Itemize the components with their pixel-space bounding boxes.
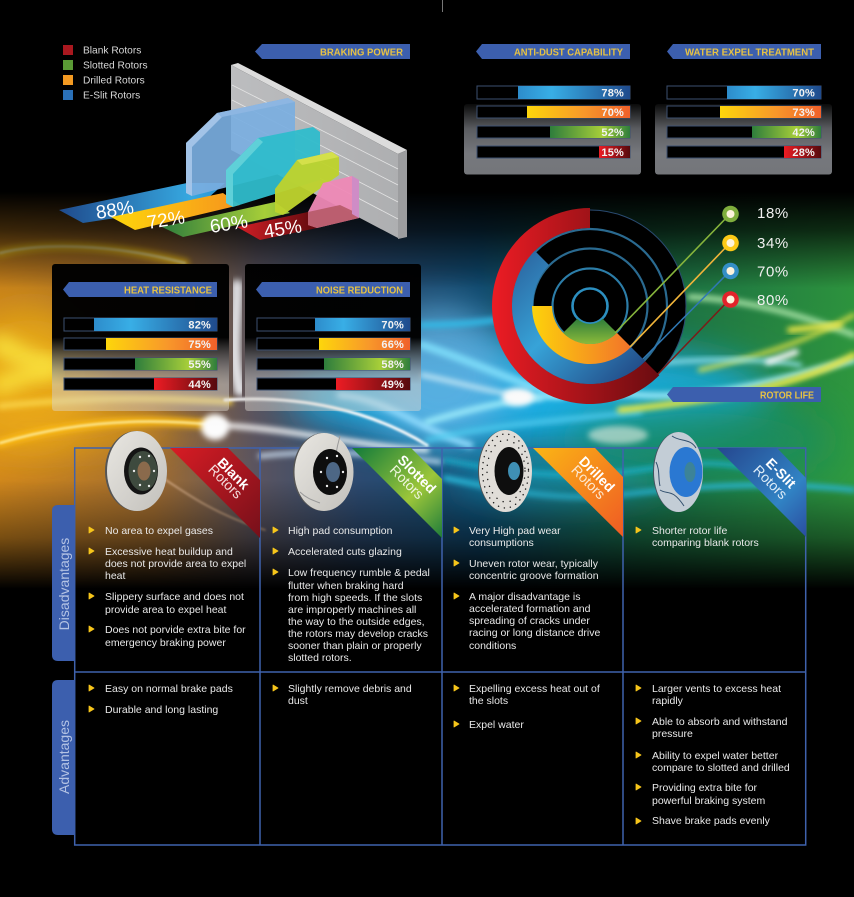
text block: slotted disadvantages: flutter when braking hard [288,580,404,592]
text block: drilled disadvantages: accelerated formation and [469,603,591,615]
marker: 34% [722,235,789,252]
text block: slotted disadvantages: High pad consumption [288,525,393,537]
side tab: disadvantages: Disadvantages [56,538,72,630]
panel: heat resistance [52,264,229,411]
text block: e-slit disadvantages [636,525,759,549]
text block: blank advantages: Durable and long lasting [105,704,218,716]
text block: slotted advantages: dust [288,695,308,707]
marker: 18%: 18% [757,205,789,222]
panel: anti-dust capability [464,44,641,174]
marker: 34%: 34% [757,235,789,252]
panel: anti-dust capability: ANTI-DUST CAPABILITY [514,48,623,58]
panel: water expel treatment: 42% [792,127,815,139]
panel: heat resistance: HEAT RESISTANCE [124,286,212,296]
panel: anti-dust capability: 78% [601,88,624,100]
panel: noise reduction: 49% [381,379,404,391]
panel: noise reduction [245,264,421,411]
panel: water expel treatment [655,44,832,174]
side tab: advantages: Advantages [56,720,72,794]
text block: blank disadvantages: does not provide area to expel [105,558,246,570]
text block: drilled advantages: Expel water [469,719,524,731]
text block: slotted disadvantages: from high speeds. If the slots [288,592,422,604]
panel: anti-dust capability: 52% [601,127,624,139]
ribbon: drilled rotors: Drilled [576,453,618,495]
text block: e-slit advantages: Shave brake pads evenly [652,815,771,827]
text block: e-slit advantages: compare to slotted and drilled [652,762,790,774]
text block: e-slit advantages: powerful braking system [652,795,765,807]
text block: e-slit disadvantages: comparing blank rotors [652,537,759,549]
text block: drilled advantages [454,683,600,731]
text block: blank disadvantages: provide area to expel heat [105,604,226,616]
panel: noise reduction: 70% [381,320,404,332]
side tab: advantages [52,680,75,835]
text block: slotted disadvantages [273,525,430,664]
ribbon: e-slit rotors: Rotors [750,462,791,502]
rotor life heading: ROTOR LIFE [760,390,814,402]
ribbon: drilled rotors [533,448,623,537]
legend [63,45,148,102]
text block: e-slit advantages: Larger vents to excess heat [652,683,781,695]
ribbon: blank rotors: Blank [214,454,253,493]
rotor image: e-slit [653,432,703,512]
value: 60%: 60% [208,211,249,238]
text block: drilled disadvantages: Uneven rotor wear, typically [469,558,599,570]
panel: water expel treatment: 28% [792,147,815,159]
text block: blank disadvantages: No area to expel gases [105,525,213,537]
text block: blank disadvantages: Slippery surface and does not [105,591,244,603]
value: 45%: 45% [262,216,303,243]
panel: heat resistance: 75% [188,339,211,351]
panel: noise reduction: 66% [381,339,404,351]
text block: slotted disadvantages: Accelerated cuts glazing [288,546,402,558]
panel: noise reduction: 58% [381,359,404,371]
ribbon: drilled rotors: Rotors [568,462,609,502]
text block: drilled disadvantages: concentric groove formation [469,570,599,582]
panel: water expel treatment: WATER EXPEL TREATMENT [685,48,814,58]
panel: anti-dust capability: 70% [601,107,624,119]
text block: drilled disadvantages: racing or long distance drive [469,627,600,639]
text block: e-slit disadvantages: Shorter rotor life [652,525,727,537]
text block: blank disadvantages: Excessive heat buildup and [105,546,233,558]
panel: anti-dust capability: 15% [601,147,624,159]
marker: 18% [722,205,789,222]
text block: e-slit advantages: Able to absorb and withstand [652,716,788,728]
text block: blank advantages: Easy on normal brake pads [105,683,233,695]
text block: drilled disadvantages [454,525,600,652]
text block: slotted disadvantages: the rotors may develop cracks [288,628,428,640]
panel: heat resistance: 82% [188,320,211,332]
braking power heading: BRAKING POWER [320,48,404,58]
text block: slotted disadvantages: slotted rotors. [288,652,352,664]
text block: slotted disadvantages: the way to the outside edges, [288,616,425,628]
braking power heading [255,44,410,59]
value: 88%: 88% [94,197,135,224]
panel: water expel treatment: 70% [792,88,815,100]
ribbon: slotted rotors [352,448,442,538]
side tab: disadvantages [52,505,75,661]
text block: e-slit advantages: Providing extra bite for [652,782,758,794]
marker: 80% [722,291,789,309]
text block: blank disadvantages: emergency braking power [105,637,226,649]
text block: drilled advantages: Expelling excess heat out of [469,683,600,695]
rotor life radial chart [492,205,789,404]
legend: Blank Rotors [83,46,141,56]
text block: slotted advantages [273,683,412,707]
text block: drilled disadvantages: Very High pad wear [469,525,561,537]
marker: 70%: 70% [757,264,789,280]
marker: 70% [722,263,789,280]
legend: Slotted Rotors [83,60,148,72]
ribbon: slotted rotors: Slotted [395,452,439,496]
ribbon: slotted rotors: Rotors [387,462,427,502]
text block: slotted disadvantages: are improperly machines all [288,604,416,616]
rotor image: drilled [478,430,532,512]
comparison table grid [74,448,806,845]
text block: blank advantages [89,683,233,716]
text block: drilled disadvantages: A major disadvantage is [469,591,580,603]
ribbon: blank rotors [170,448,260,538]
text block: e-slit advantages: Ability to expel water better [652,750,779,762]
text block: blank disadvantages [89,525,246,649]
text block: drilled advantages: the slots [469,695,508,707]
text block: slotted advantages: Slightly remove debris and [288,683,412,695]
rotor life heading [667,387,821,402]
text block: slotted disadvantages: sooner than plain or properly [288,640,422,652]
legend: E-Slit Rotors [83,90,140,102]
rotor image: blank [105,431,167,511]
text block: drilled disadvantages: consumptions [469,537,534,549]
legend: Drilled Rotors [83,76,145,86]
text block: e-slit advantages: rapidly [652,695,684,707]
text block: e-slit advantages: pressure [652,728,693,740]
marker: 80%: 80% [757,292,789,309]
3D braking power chart [59,63,407,243]
panel: heat resistance: 44% [188,379,211,391]
panel: water expel treatment: 73% [792,107,815,119]
panel: heat resistance: 55% [188,359,211,371]
text block: blank disadvantages: Does not porvide extra bite for [105,624,246,636]
text block: blank disadvantages: heat [105,570,126,582]
rotor image: slotted [293,433,354,511]
ribbon: e-slit rotors [717,448,806,537]
text block: drilled disadvantages: spreading of cracks under [469,615,590,627]
ribbon: blank rotors: Rotors [205,461,246,502]
text block: e-slit advantages [636,683,790,827]
panel: noise reduction: NOISE REDUCTION [316,286,403,296]
ribbon: e-slit rotors: E-Slit [763,455,800,492]
text block: drilled disadvantages: conditions [469,640,516,652]
text block: slotted disadvantages: Low frequency rumble & pedal [288,567,430,579]
value: 72%: 72% [145,207,186,234]
